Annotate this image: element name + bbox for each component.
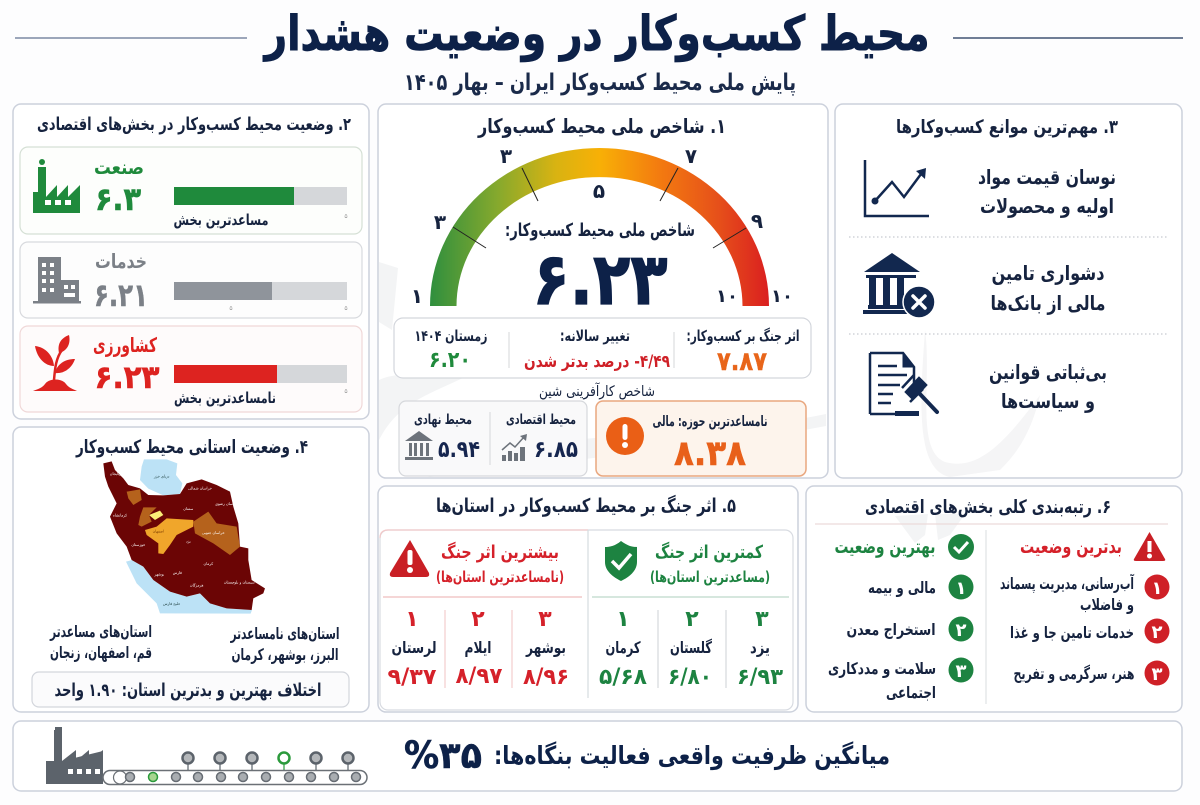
province: Golestan [668,607,713,690]
panel: sectors [13,104,369,419]
panel: provinces [13,427,369,712]
province: Ilam [456,607,503,689]
watermark [379,262,826,477]
label: industry: صنعت [94,155,144,179]
item: price volatility: نوسان قیمت مواد [978,165,1116,189]
gauge label: شاخص ملی محیط کسب‌وکار: [505,220,695,241]
stat strip: زمستان ۱۴۰۴ [414,327,488,345]
column: best [828,534,974,702]
item: bank finance: دشواری تامین [992,261,1104,285]
text: better provinces: قم، اصفهان، زنجان [50,643,152,662]
column: worst: بدترین وضعیت [1020,536,1122,558]
map of Iran: آذربایجان [110,471,124,476]
column: best: ۲ [956,620,966,641]
column: best: مالی و بیمه [868,578,936,597]
heading: sectors: ۲. وضعیت محیط کسب‌وکار در بخش‌های اقتصادی [37,115,351,135]
province: Kerman: کرمان [606,638,641,657]
value: services: ۶.۲۱ [94,276,148,314]
province: Ilam: ۲ [471,607,485,632]
gauge: ۹ [751,209,763,233]
column: worst: آب‌رسانی، مدیریت پسماند [1000,573,1134,594]
item: legal instability: بی‌ثباتی قوانین [989,360,1107,384]
map of Iran: خوزستان [131,543,145,547]
item: bank finance [863,253,1106,318]
column: best: استخراج معدن [846,620,936,639]
map of Iran: سیستان و بلوچستان [224,580,255,584]
province: Yazd: یزد [750,638,770,657]
map of Iran: کرمانشاه [113,514,127,518]
province: Yazd [737,607,784,690]
watermark [921,330,1040,477]
box: environments: ۵.۹۴ [438,437,480,463]
heading: obstacles: ۳. مهم‌ترین موانع کسب‌وکارها [896,117,1119,138]
bar: services: ۵ [229,305,233,312]
icon: building [33,257,81,304]
bar: industry: ۵ [344,213,348,220]
text: better provinces: استان‌های مساعدتر [49,622,152,641]
icon: plant [33,335,77,391]
gauge value: ۶.۲۳ [532,237,668,321]
province: Golestan: ۲ [685,607,699,632]
heading: sector ranking: ۶. رتبه‌بندی کلی بخش‌های اقتصادی [865,497,1111,518]
gauge: ۱۰ [771,286,793,307]
card: industry [20,147,362,234]
column: worst: ۱ [1152,578,1162,599]
text: better provinces [49,622,152,662]
map of Iran: یزد [186,540,191,544]
column head: most impact: (نامساعدترین استان‌ها) [436,568,564,586]
map of Iran: خراسان رضوی [215,502,238,506]
bar: industry [174,187,348,220]
column: best: ۳ [956,661,966,682]
column head: least impact: کمترین اثر جنگ [655,541,763,563]
text: worse provinces: استان‌های نامساعدتر [230,624,340,643]
map of Iran: خراسان جنوبی [202,531,225,535]
province: Lorestan [388,607,437,690]
box: environments: محیط اقتصادی [506,412,576,428]
map of Iran: خلیج فارس [163,602,180,606]
column head: least impact [605,541,770,586]
panel: obstacles [835,104,1182,478]
column: best: سلامت و مددکاری [828,659,936,678]
stat strip: اثر جنگ بر کسب‌وکار: [686,327,800,345]
map of Iran: فارس [173,571,182,575]
box: worst domain: نامساعدترین حوزه: مالی [652,414,768,430]
column: worst: ۲ [1152,622,1162,643]
item: bank finance: مالی از بانک‌ها [990,291,1106,315]
text: worse provinces [230,624,340,664]
map of Iran: دریای خزر [153,474,170,478]
stat strip: ۴/۴۹- درصد بدتر شدن [524,352,670,372]
province: Golestan: ۶/۸۰ [668,665,712,690]
gauge: ۵ [593,179,605,203]
map of Iran: خراسان شمالی [188,486,212,490]
icon: institution [405,431,433,460]
column: worst: خدمات تامین جا و غذا [1010,623,1134,642]
province: Golestan: گلستان [670,638,713,657]
caption: agriculture: نامساعدترین بخش [174,389,276,407]
icon: factory and conveyor [46,727,367,784]
stat strip [394,318,811,378]
map of Iran: کرمان [204,562,213,566]
province: Bushehr: ۳ [538,607,552,632]
column head: most impact [390,540,564,586]
box: environments [399,401,587,476]
map of Iran: اصفهان [153,530,164,534]
gauge: ۱۰ [716,286,738,307]
bar: services: ۵ [344,305,348,312]
map of Iran: بوشهر [153,572,164,576]
province: Yazd: ۳ [755,607,769,632]
gauge: ۳ [500,144,512,168]
column: worst [1000,532,1170,686]
label: services: خدمات [95,249,147,273]
box: environments: محیط نهادی [414,412,472,428]
panel: capacity banner [13,721,1182,791]
value: industry: ۶.۳ [95,180,141,218]
heading: provinces: ۴. وضعیت استانی محیط کسب‌وکار [75,437,308,458]
province: Ilam: ایلام [464,638,492,657]
province: Bushehr [523,607,569,690]
item: legal instability [870,353,1107,416]
column: worst: هنر، سرگرمی و تفریح [1014,664,1134,683]
subtitle: پایش ملی محیط کسب‌وکار ایران – بهار ۱۴۰۵ [404,70,796,96]
province: Kerman: ۵/۶۸ [599,665,648,690]
gauge: ۱ [411,284,423,308]
box: worst domain [596,401,806,476]
bar: agriculture: ۵ [344,388,348,395]
stat strip: ۶.۲۰ [429,348,471,373]
callout: difference: اختلاف بهترین و بدترین استان: ۱.۹۰ واحد [55,680,322,701]
panel: sector ranking [806,486,1182,712]
province: Bushehr: بوشهر [525,638,566,657]
province: Ilam: ۸/۹۷ [456,664,503,689]
icon: factory [33,159,80,213]
bar: agriculture [174,365,348,395]
stat strip: تغییر سالانه: [560,327,630,345]
caption: entrepreneurship: شاخص کارآفرینی شین [539,382,655,400]
banner text: میانگین ظرفیت واقعی فعالیت بنگاه‌ها: [494,741,890,771]
column: best: ۱ [956,578,966,599]
column: best: اجتماعی [886,683,936,702]
province: Kerman [599,607,648,690]
icon: growth [502,434,527,461]
box: environments: ۶.۸۵ [534,437,578,463]
column head: least impact: (مساعدترین استان‌ها) [650,568,770,586]
value: agriculture: ۶.۲۳ [94,358,160,396]
province: Lorestan: ۱ [405,607,419,632]
box: worst domain: ۸.۳۸ [674,434,746,474]
gauge: ۷ [685,144,697,168]
heading: war impact: ۵. اثر جنگ بر محیط کسب‌وکار در استان‌ها [436,494,736,517]
card: agriculture [20,326,362,412]
gauge: ۳ [434,210,446,234]
item: price volatility [865,160,1116,218]
gauge [411,144,793,308]
bar: services [174,282,348,312]
inner table [380,530,793,710]
map of Iran: سمنان [183,507,193,511]
panel: national index [378,104,828,478]
province: Bushehr: ۸/۹۶ [523,665,569,690]
province: Lorestan: لرستان [392,638,436,657]
banner value: %۳۵ [404,734,482,777]
callout: difference [32,672,349,707]
title: محیط کسب‌وکار در وضعیت هشدار [263,6,930,62]
caption: industry: مساعدترین بخش [174,211,268,229]
column: worst: ۳ [1152,664,1162,685]
column head: most impact: بیشترین اثر جنگ [441,541,559,563]
panel: war impact [378,486,798,712]
province: Lorestan: ۹/۳۷ [388,665,437,690]
card: services [20,242,362,318]
text: worse provinces: البرز، بوشهر، کرمان [232,645,338,664]
item: price volatility: اولیه و محصولات [980,194,1114,218]
heading: national index: ۱. شاخص ملی محیط کسب‌وکار [477,114,726,138]
item: legal instability: و سیاست‌ها [1001,389,1095,413]
map of Iran: هرمزگان [190,583,203,588]
column: best: بهترین وضعیت [834,536,936,558]
map of Iran [103,459,265,614]
stat strip: ۷.۸۷ [717,347,767,377]
province: Yazd: ۶/۹۳ [737,665,784,690]
province: Kerman: ۱ [616,607,630,632]
watermark [895,514,965,543]
column: worst: و فاضلاب [1080,595,1134,614]
label: agriculture: کشاورزی [93,333,157,357]
